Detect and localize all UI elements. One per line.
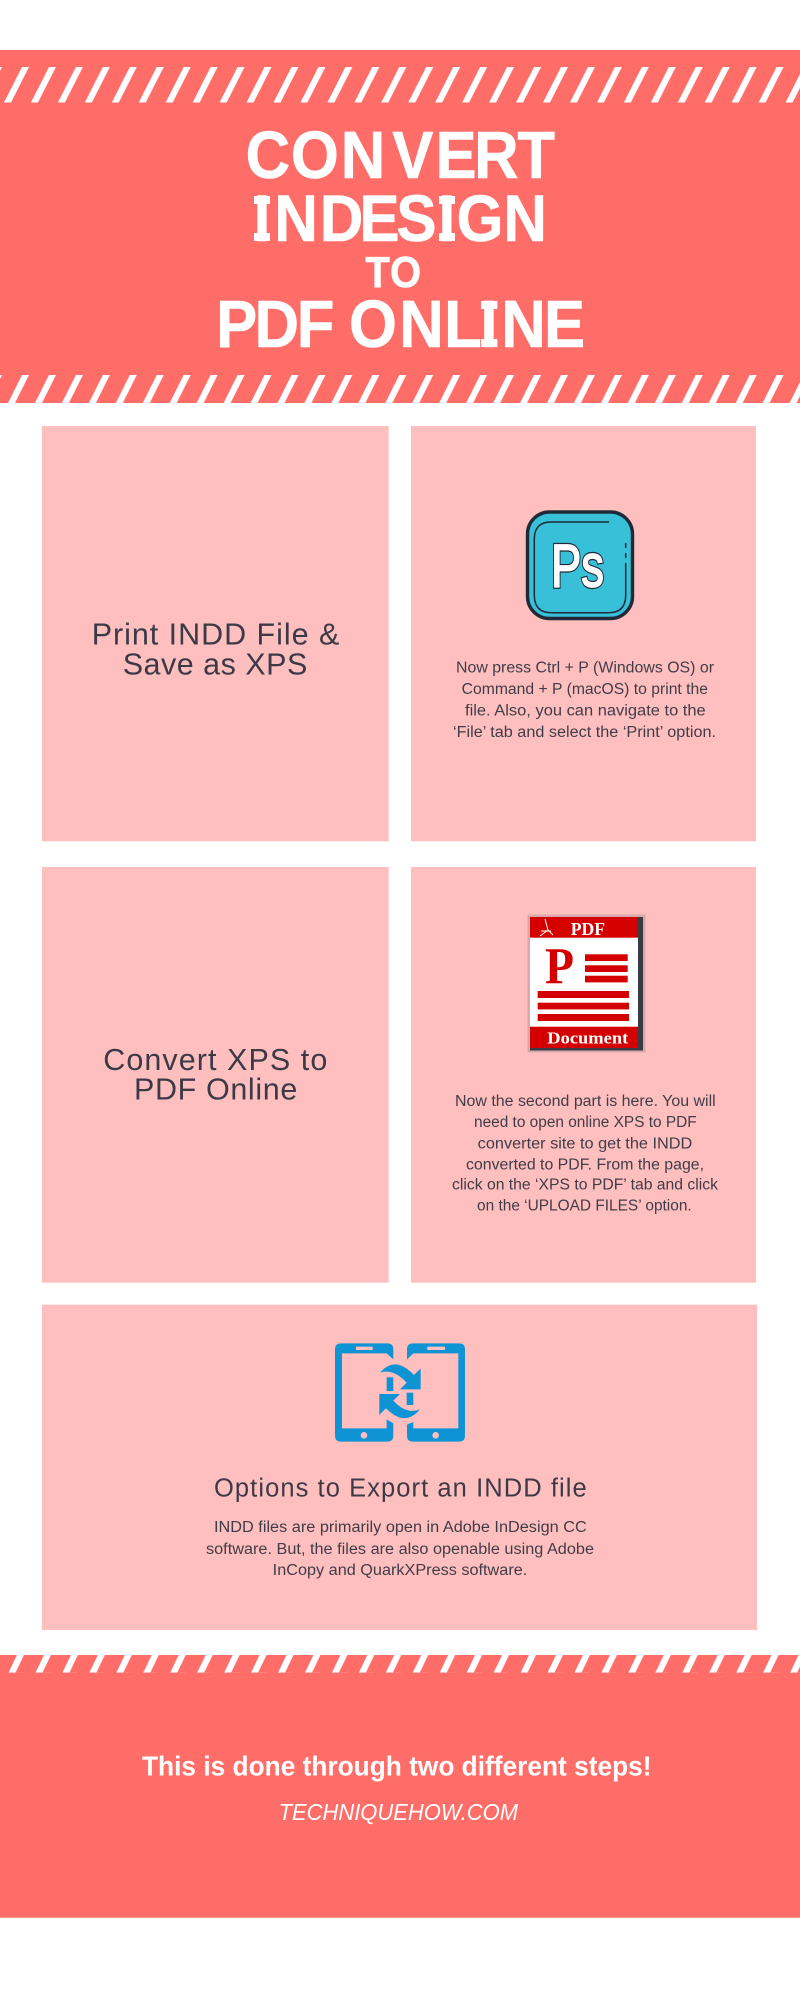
footer website: TECHNIQUEHOW.COM <box>279 1799 519 1825</box>
heading: print INDD: Save as XPS <box>123 647 307 681</box>
heading: convert XPS <box>103 1043 327 1106</box>
title: INDESIGN <box>254 183 547 256</box>
text: print instructions: Now press Ctrl + P (Windows OS) or <box>456 659 714 676</box>
title <box>216 118 585 362</box>
icon: phones with sync arrows <box>335 1343 465 1442</box>
text: conversion instructions: need to open online XPS to PDF <box>474 1114 697 1131</box>
panel: export options <box>42 1305 757 1630</box>
text: export description: InCopy and QuarkXPress software. <box>273 1562 527 1579</box>
panel: convert details <box>411 867 756 1283</box>
text: print instructions <box>453 659 716 741</box>
text: print instructions: Command + P (macOS) to print the <box>462 681 708 698</box>
icon: PDF document: P <box>545 938 574 995</box>
icon: Photoshop <box>528 512 632 618</box>
text: export description <box>206 1519 594 1579</box>
text: conversion instructions: converted to PDF. From the page, <box>466 1156 704 1173</box>
panel: convert heading <box>42 867 389 1283</box>
icon: Photoshop: Ps <box>551 533 604 600</box>
icon: PDF document: Document <box>547 1028 629 1047</box>
text: conversion instructions <box>452 1093 718 1214</box>
heading: export options: Options to Export an INDD file <box>214 1475 587 1503</box>
text: conversion instructions: click on the ‘XPS to PDF’ tab and click <box>452 1176 718 1194</box>
icon: PDF document: PDF <box>571 919 605 939</box>
heading: print INDD: Print INDD File & <box>92 617 339 651</box>
text: conversion instructions: converter site to get the INDD <box>478 1135 692 1152</box>
footer message: This is done through two different steps! <box>142 1751 652 1782</box>
text: conversion instructions: on the ‘UPLOAD FILES’ option. <box>477 1198 692 1214</box>
heading: convert XPS: Convert XPS to <box>103 1043 327 1077</box>
footer banner <box>0 1655 800 1918</box>
icon: Photoshop: Ps <box>551 533 604 600</box>
title: CONVERT <box>246 118 555 193</box>
text: export description: software. But, the files are also openable using Adobe <box>206 1541 594 1558</box>
header banner <box>0 50 800 403</box>
title: TO <box>365 247 421 296</box>
panel: print INDD details <box>411 426 756 841</box>
panel: print INDD heading <box>42 426 389 841</box>
text: conversion instructions: Now the second part is here. You will <box>455 1093 716 1110</box>
icon: PDF document <box>528 914 646 1052</box>
text: print instructions: file. Also, you can navigate to the <box>465 702 706 719</box>
title: PDF ONLINE <box>216 287 585 362</box>
text: export description: INDD files are primarily open in Adobe InDesign CC <box>214 1519 587 1536</box>
heading: print INDD <box>92 617 339 681</box>
text: print instructions: ‘File’ tab and select the ‘Print’ option. <box>453 724 716 741</box>
heading: convert XPS: PDF Online <box>134 1072 297 1106</box>
